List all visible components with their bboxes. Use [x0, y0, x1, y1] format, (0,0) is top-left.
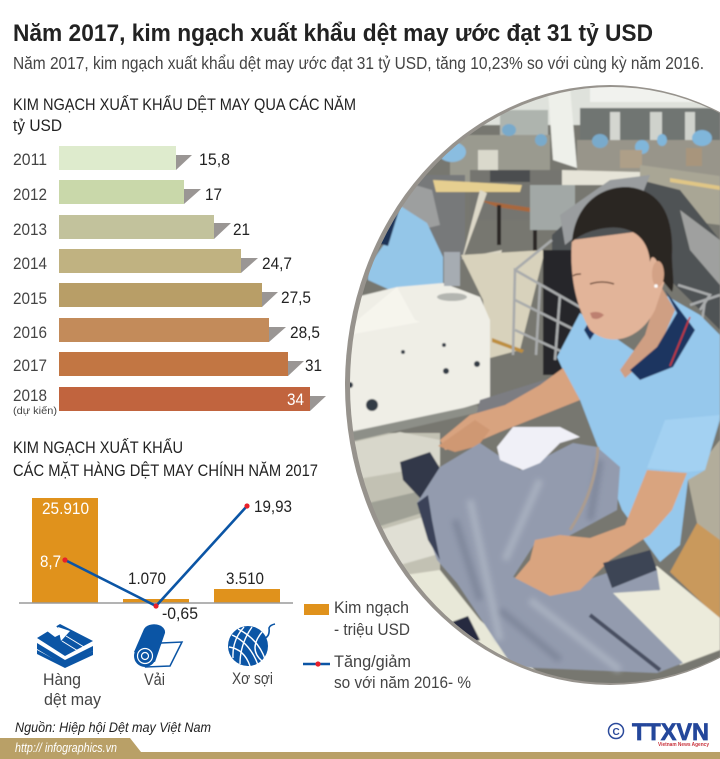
bar 2014: 24,7: [262, 255, 292, 273]
factory background: ceiling, workers, tables, racks: [400, 85, 720, 375]
legend: turnover: [304, 599, 410, 639]
combo chart: items turnover and growth: [19, 498, 293, 623]
combo chart: items turnover and growth: 3.510: [226, 570, 264, 588]
bar 2012: [13, 180, 222, 204]
heading: export turnover by year: [13, 95, 356, 135]
bar 2015: [13, 283, 311, 308]
legend: growth line: Tăng/giảm: [334, 653, 411, 671]
bar 2014: 2014: [13, 255, 47, 273]
legend: growth line: so với năm 2016- %: [334, 674, 471, 692]
bar 2015: 2015: [13, 290, 47, 308]
bar 2017: 2017: [13, 357, 47, 375]
heading: main textile export items 2017: KIM NGẠCH XUẤT KHẨU: [13, 438, 183, 457]
bar 2014: [13, 249, 292, 273]
combo chart: items turnover and growth: 1.070: [128, 570, 166, 588]
bar 2011: 15,8: [199, 151, 230, 169]
bar 2016: [13, 318, 320, 342]
woman worker: shirt, face, hair, collar: [557, 187, 720, 562]
heading: export turnover by year: tỷ USD: [13, 117, 62, 135]
bar 2016: 2016: [13, 324, 47, 342]
bar 2012: 17: [205, 186, 222, 204]
source note: Nguồn: Hiệp hội Dệt may Việt Nam: [15, 720, 211, 735]
heading: export turnover by year: KIM NGẠCH XUẤT KHẨU DỆT MAY QUA CÁC NĂM: [13, 95, 356, 114]
photo: garment factory worker in elliptical frame: [340, 80, 720, 690]
bar 2018 forecast: 34: [287, 391, 304, 409]
combo chart: items turnover and growth: 8,7: [40, 553, 61, 571]
second arm and hand: [515, 470, 687, 596]
label: fabric: Vải: [144, 671, 165, 689]
bar 2011: [13, 146, 230, 170]
logo: TTXVN: Vietnam News Agency: [658, 742, 709, 748]
footer band with url: http:// infographics.vn: [15, 741, 117, 755]
heading: main textile export items 2017: CÁC MẶT HÀNG DỆT MAY CHÍNH NĂM 2017: [13, 461, 318, 480]
combo chart: items turnover and growth: 25.910: [42, 500, 89, 518]
bar 2017: 31: [305, 357, 322, 375]
bar 2018 forecast: 2018: [13, 387, 47, 405]
bar 2016: 28,5: [290, 324, 320, 342]
forearm guiding the fabric: [438, 368, 580, 452]
icon: yarn ball: [228, 624, 275, 666]
bar 2013: 2013: [13, 221, 47, 239]
legend: turnover: - triệu USD: [334, 621, 410, 639]
label: garments: Hàng: [43, 671, 81, 689]
legend: growth line: [303, 653, 471, 692]
bar 2013: [13, 215, 250, 239]
denim garment being sewn: [417, 427, 683, 673]
left worker: [368, 205, 443, 290]
label: yarn: Xơ sợi: [232, 670, 273, 688]
combo chart: items turnover and growth: -0,65: [162, 605, 198, 623]
label: garments: dệt may: [44, 691, 102, 709]
sewing machine: [350, 251, 546, 575]
footer band with url: [0, 738, 720, 759]
bar 2018 forecast: (dự kiến): [13, 405, 57, 417]
work table: [405, 440, 720, 675]
bar 2012: 2012: [13, 186, 47, 204]
icon: fabric roll: [134, 624, 182, 667]
logo: TTXVN: C: [612, 727, 620, 738]
legend: turnover: Kim ngạch: [334, 599, 409, 617]
bar 2013: 21: [233, 221, 250, 239]
logo: TTXVN: TTXVN: [632, 719, 709, 746]
bar 2017: [13, 352, 322, 376]
combo chart: items turnover and growth: 19,93: [254, 498, 292, 516]
label: garments: [43, 671, 102, 709]
bar chart: turnover by year: [13, 146, 326, 417]
bar 2018 forecast: [13, 387, 326, 417]
title: Năm 2017, kim ngạch xuất khẩu dệt may ước đạt 31 tỷ USD: [13, 20, 653, 47]
heading: main textile export items 2017: [13, 438, 318, 480]
bar 2015: 27,5: [281, 289, 311, 307]
icon: stacked garments: [37, 624, 93, 668]
bar 2011: 2011: [13, 151, 47, 169]
